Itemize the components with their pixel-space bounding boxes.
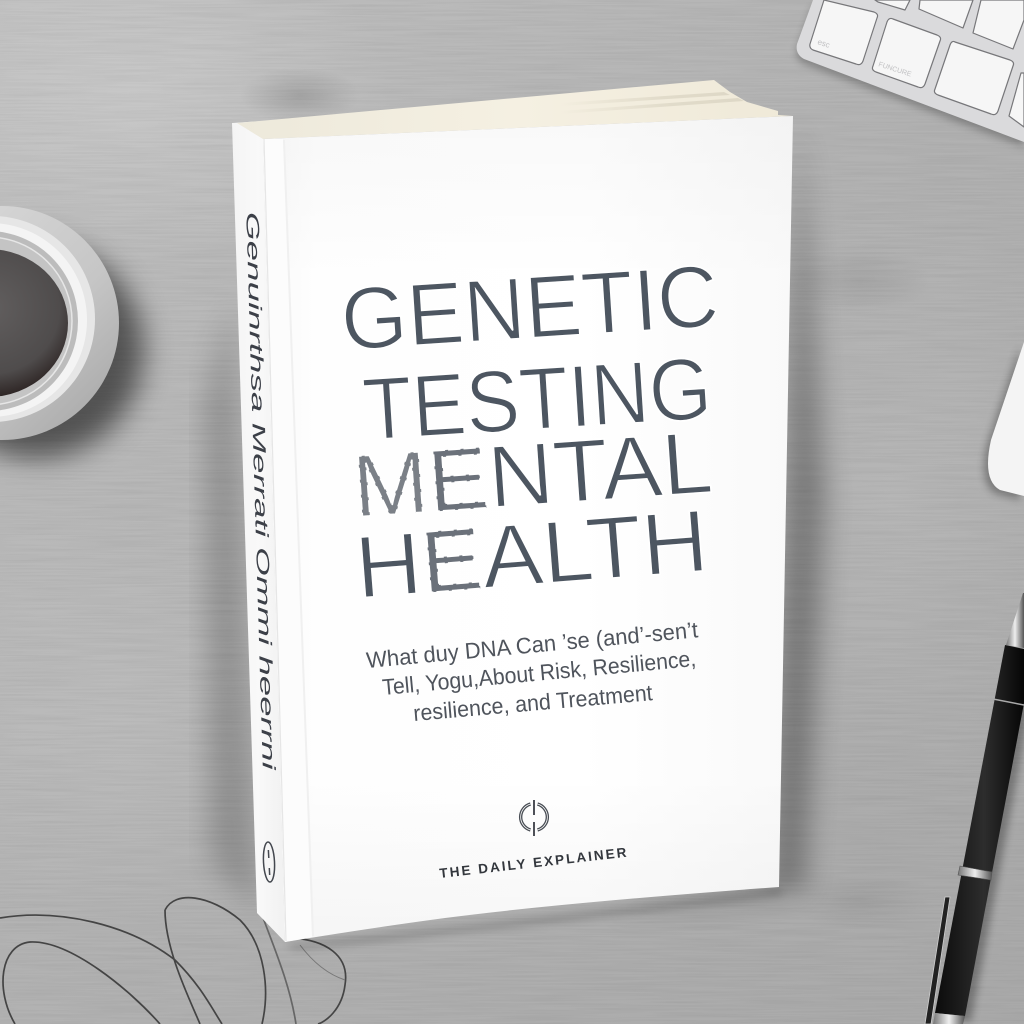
publisher name: THE DAILY EXPLAINER — [439, 845, 627, 881]
spine — [232, 121, 285, 942]
pen tip — [1006, 593, 1024, 648]
pen ring — [958, 866, 992, 880]
key labels: FUNCURE — [877, 61, 912, 79]
cover subtitle: Tell, Yogu,About Risk, Resilience, — [381, 646, 697, 700]
coffee cup — [0, 206, 144, 458]
cover subtitle: What duy DNA Can ’se (and’-sen’t — [365, 617, 700, 673]
cover title: MENTAL — [349, 412, 715, 536]
key labels — [816, 37, 912, 79]
cover title: TESTING — [360, 338, 715, 459]
publisher logo — [521, 800, 547, 836]
page block — [237, 80, 793, 139]
cover title — [338, 246, 721, 617]
book — [205, 80, 825, 950]
front cover — [263, 116, 793, 942]
spine logo — [262, 842, 276, 882]
pen — [925, 593, 1024, 1024]
cover subtitle — [365, 617, 700, 726]
keyboard keys — [810, 0, 1024, 127]
cover title: GENETIC — [338, 246, 721, 369]
pen clip — [925, 897, 950, 1024]
cover title: HEALTH — [352, 491, 711, 617]
keyboard — [797, 0, 1024, 147]
pen lower metal — [933, 1013, 965, 1024]
computer mouse — [984, 342, 1024, 500]
book shadow — [600, 120, 825, 915]
key labels: esc — [816, 37, 831, 50]
cables — [0, 898, 346, 1024]
cover subtitle: resilience, and Treatment — [412, 680, 654, 726]
coffee surface — [0, 249, 68, 397]
cover hinge — [263, 139, 312, 942]
pen barrel — [935, 645, 1024, 1016]
spine title: Genuinrthsa Merrati Ommi heerrni — [242, 212, 279, 772]
